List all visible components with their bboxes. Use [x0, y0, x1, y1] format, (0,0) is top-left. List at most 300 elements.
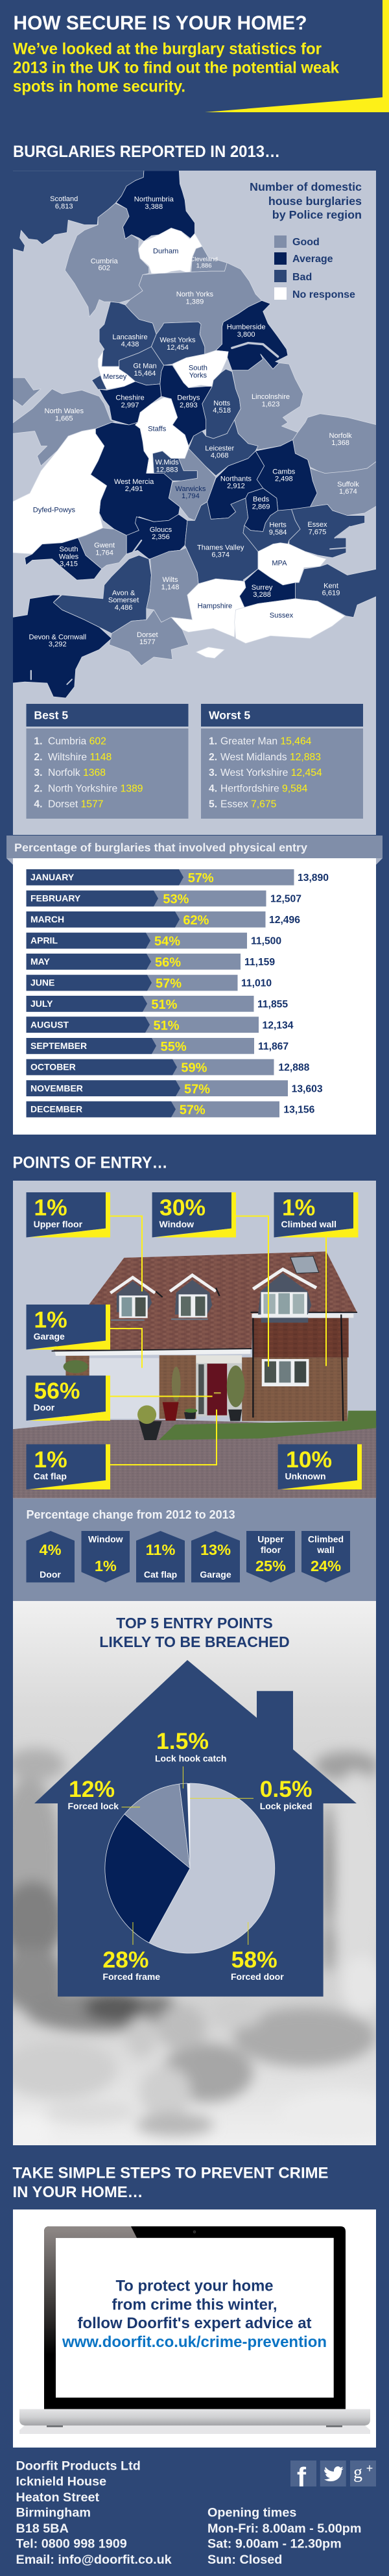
- panel: best 5: 2.: [34, 752, 42, 763]
- badge: window: [82, 1531, 130, 1582]
- badge: upper floor: [246, 1531, 295, 1582]
- callout: window: Window: [159, 1219, 194, 1229]
- map labels: 2,869: [252, 503, 270, 511]
- panel: worst 5: 5.: [209, 799, 217, 810]
- bar: January: [26, 869, 329, 885]
- pie label: lock hook catch: Lock hook catch: [155, 1753, 226, 1763]
- bar: July: JULY: [30, 998, 53, 1009]
- map labels: 1,764: [95, 549, 113, 557]
- badge: window: 1%: [95, 1558, 117, 1574]
- roof: [53, 1251, 357, 1351]
- map legend heading: [250, 180, 362, 221]
- map labels: Dorset: [137, 631, 158, 639]
- map labels: 7,675: [309, 528, 326, 536]
- callout: upper floor: 1%: [34, 1195, 67, 1221]
- bar: May: 56%: [155, 956, 181, 970]
- badge: cat flap: 11%: [146, 1541, 175, 1558]
- map legend heading: house burglaries: [268, 195, 362, 208]
- laptop screen text: www.doorfit.co.uk/crime-prevention: [62, 2333, 327, 2351]
- map labels: Devon & Cornwall: [29, 633, 86, 641]
- bar: November: NOVEMBER: [30, 1083, 83, 1093]
- callout: garage: [26, 1305, 142, 1368]
- region: Derbys: [160, 365, 212, 446]
- panel: worst 5: 4.: [209, 783, 217, 794]
- laptop screen text: follow Doorfit's expert advice at: [78, 2315, 312, 2332]
- callout: window: 30%: [159, 1195, 206, 1221]
- badge: door: [26, 1531, 75, 1582]
- region: Cheshire: [99, 381, 161, 425]
- dormer 1: [110, 1277, 163, 1321]
- region: Leicester: [189, 420, 258, 475]
- region: Isle of Wight: [196, 647, 224, 658]
- badge: climbed wall: 24%: [311, 1558, 341, 1574]
- bar: October: 59%: [181, 1061, 207, 1076]
- badge: garage: [191, 1531, 240, 1582]
- pie label: forced frame: [102, 1947, 160, 1982]
- map labels: W.Mids: [155, 459, 179, 466]
- map labels: 9,584: [269, 529, 287, 536]
- badge: garage: 13%: [200, 1541, 231, 1558]
- pie label: forced lock: 12%: [69, 1776, 115, 1802]
- region: Kent: [295, 564, 377, 618]
- region: Staffs: [136, 398, 189, 474]
- badge: climbed wall: [301, 1531, 350, 1582]
- bar: January: 13,890: [298, 873, 329, 884]
- panel: best 5: [26, 704, 188, 819]
- map legend heading: Number of domestic: [250, 180, 362, 193]
- map labels: 6,813: [55, 203, 73, 211]
- region: Durham: [139, 228, 202, 274]
- map labels: Notts: [213, 400, 231, 407]
- map labels: 12,883: [156, 466, 178, 474]
- map labels: West Yorks: [159, 337, 196, 344]
- bar: June: [26, 975, 272, 991]
- pie label: forced door: [231, 1947, 284, 1982]
- callout: climbed wall: 1%: [282, 1195, 315, 1221]
- panel: best 5: Best 5: [34, 709, 68, 722]
- region: Herts: [243, 509, 300, 551]
- callout: cat flap: Cat flap: [34, 1471, 67, 1481]
- region: South Wales: [25, 538, 102, 580]
- bar: May: 11,159: [244, 957, 275, 968]
- map labels: Humberside: [227, 324, 266, 331]
- bar: May: [26, 954, 275, 970]
- icon: google plus: [350, 2461, 376, 2486]
- map labels: 6,619: [322, 590, 340, 597]
- laptop screen text: [62, 2277, 327, 2351]
- region: Humberside: [216, 300, 288, 370]
- region: Scotland: [12, 171, 144, 252]
- footer address: B18 5BA: [16, 2522, 69, 2536]
- map labels: 3,415: [60, 560, 78, 568]
- banner: percentage of burglaries: [6, 836, 383, 865]
- laptop screen text: from crime this winter,: [112, 2296, 277, 2313]
- estuaries: [31, 343, 350, 684]
- footer opening times: Opening times: [207, 2506, 296, 2520]
- bar: July: 51%: [151, 998, 178, 1012]
- map labels: North Wales: [44, 407, 84, 415]
- map labels: Gt Man: [133, 362, 157, 370]
- bar: August: 51%: [153, 1018, 180, 1033]
- heading: burglaries reported: BURGLARIES REPORTED IN 2013…: [13, 143, 280, 161]
- bar: June: JUNE: [30, 978, 54, 988]
- bar: November: 57%: [184, 1082, 210, 1096]
- map labels: Herts: [269, 522, 287, 529]
- panel: best 5: 3.: [34, 767, 42, 778]
- map labels: 1,665: [55, 415, 73, 422]
- map labels: Leicester: [205, 444, 234, 452]
- map labels: 2,498: [275, 475, 293, 483]
- region: Dyfed-Powys: [12, 429, 107, 554]
- region: Northumbria: [116, 171, 194, 241]
- pie label: forced lock: [67, 1776, 119, 1811]
- bar: October: 12,888: [278, 1063, 310, 1074]
- panel: worst 5: Hertfordshire: [220, 783, 282, 794]
- icon: google plus: g: [353, 2462, 362, 2483]
- panel: worst 5: Essex: [220, 799, 251, 810]
- region: Northants: [207, 451, 265, 519]
- map labels: Surrey: [252, 584, 273, 592]
- bar chart: months: [26, 869, 329, 1118]
- region: Dorset: [109, 610, 191, 666]
- map labels: Warwicks: [175, 485, 206, 493]
- footer address: Heaton Street: [16, 2490, 100, 2505]
- map labels: West Mercia: [114, 478, 154, 486]
- map of police regions: [12, 171, 377, 698]
- panel: best 5: 4.: [34, 799, 42, 810]
- panel: best 5: 1.: [34, 736, 42, 747]
- map labels: Beds: [253, 496, 270, 503]
- bar: July: 11,855: [257, 999, 288, 1010]
- map labels: 4,438: [121, 341, 139, 348]
- panel: physical entry chart background: [13, 858, 376, 1135]
- badge: climbed wall: Climbed: [308, 1534, 344, 1545]
- region: Suffolk: [310, 461, 377, 516]
- badge: door: Door: [40, 1569, 61, 1580]
- bar: March: MARCH: [30, 914, 64, 924]
- map labels: Durham: [153, 248, 178, 256]
- map labels: Somerset: [108, 597, 139, 605]
- map labels: Dyfed-Powys: [33, 507, 76, 514]
- map labels: 15,464: [134, 370, 156, 378]
- map labels: 4,068: [211, 452, 229, 460]
- map labels: MPA: [272, 560, 287, 568]
- pie label: forced frame: Forced frame: [102, 1971, 160, 1982]
- map labels: 3,292: [49, 641, 67, 649]
- map labels: Cambs: [272, 468, 296, 475]
- region: West Midlands: [152, 451, 197, 481]
- intro text: 2013 in the UK to find out the potential weak: [13, 58, 339, 77]
- pie leader lines: [122, 1766, 253, 1945]
- region: Gwent: [78, 528, 126, 569]
- callout: cat flap: 1%: [34, 1447, 67, 1473]
- bar: March: 62%: [183, 913, 209, 928]
- slice: forced lock 12%: [124, 1784, 190, 1868]
- callout: window: [152, 1192, 268, 1367]
- footer address: Birmingham: [16, 2506, 91, 2520]
- region: Avon and Somerset: [53, 555, 151, 633]
- map labels: 12,454: [167, 344, 189, 352]
- panel: worst 5: West Yorkshire: [220, 767, 291, 778]
- map labels: 2,912: [227, 483, 245, 490]
- callout: climbed wall: [274, 1192, 358, 1366]
- region: Thames Valley: [185, 498, 258, 584]
- map labels: 3,800: [237, 331, 255, 339]
- map labels: 1,623: [262, 400, 279, 408]
- bar: February: [26, 891, 301, 907]
- pie label: forced door: 58%: [231, 1947, 277, 1973]
- map labels: Cumbria: [91, 258, 118, 265]
- map labels: 1,886: [196, 262, 212, 269]
- panel: worst 5: 12,454: [291, 767, 322, 778]
- panel: best 5: 1368: [83, 767, 106, 778]
- garage door: [89, 1358, 159, 1419]
- panel: worst 5: Greater Man: [220, 736, 280, 747]
- bar: January: JANUARY: [30, 872, 75, 882]
- bar: April: 11,500: [251, 936, 281, 947]
- map labels: Lincolnshire: [252, 393, 290, 401]
- bar: December: [26, 1101, 315, 1118]
- pie label: forced door: Forced door: [231, 1971, 284, 1982]
- map labels: 1,389: [186, 298, 204, 306]
- icon: twitter: [320, 2461, 346, 2486]
- downpipes: [253, 1314, 343, 1421]
- map labels: Wilts: [163, 576, 178, 584]
- map labels: 2,997: [121, 402, 139, 409]
- map labels: 3,288: [253, 591, 271, 599]
- map labels: Mersey: [103, 373, 127, 381]
- bar: February: 53%: [163, 893, 189, 907]
- dormer 3: [253, 1270, 316, 1316]
- bar: May: MAY: [30, 956, 50, 967]
- badge: window: Window: [88, 1534, 123, 1545]
- bar: February: 12,507: [270, 894, 301, 905]
- bar: December: 57%: [180, 1103, 206, 1118]
- skylight: [290, 1256, 319, 1273]
- panel: worst 5: 3.: [209, 767, 217, 778]
- bar: April: 54%: [154, 935, 180, 949]
- heading: take simple steps: IN YOUR HOME…: [13, 2184, 143, 2201]
- map labels: Kent: [324, 582, 338, 590]
- panel: best 5: 2.: [34, 783, 42, 794]
- slice: lock hook catch 1.5%: [180, 1783, 190, 1868]
- panel: percentage change: [13, 1499, 376, 1601]
- icon: laptop: [19, 2226, 370, 2434]
- map labels: Northumbria: [134, 196, 174, 204]
- bar: December: 13,156: [283, 1105, 315, 1116]
- icon: facebook: [290, 2461, 316, 2492]
- map labels: Suffolk: [337, 481, 359, 488]
- panel: best 5: 602: [89, 736, 106, 747]
- bar: September: 55%: [161, 1040, 187, 1054]
- callout: door: 56%: [34, 1378, 80, 1404]
- heading: top 5 entry points: TOP 5 ENTRY POINTS: [116, 1615, 273, 1631]
- badge: upper floor: 25%: [255, 1558, 286, 1574]
- map labels: [29, 195, 359, 649]
- slice: lock picked 0.5%: [187, 1783, 190, 1868]
- bar: August: [26, 1017, 294, 1033]
- map labels: 6,374: [211, 551, 230, 559]
- map labels: 2,893: [180, 402, 198, 409]
- panel: best 5: Wiltshire: [48, 752, 89, 763]
- region: Surrey: [239, 569, 295, 607]
- heading: top 5 entry points: [99, 1615, 290, 1650]
- bar: April: [26, 933, 281, 949]
- pie chart: entry points: [105, 1783, 275, 1953]
- bar: April: APRIL: [30, 935, 58, 946]
- planters and plants: [64, 1360, 244, 1440]
- panel: best 5: 1148: [89, 752, 112, 763]
- map labels: Sussex: [270, 612, 294, 620]
- photo: hands background: [0, 1601, 389, 2154]
- panel: best 5: Cumbria: [48, 736, 89, 747]
- footer opening times: Mon-Fri: 8.00am - 5.00pm: [207, 2522, 361, 2536]
- heading: take simple steps: [13, 2164, 328, 2201]
- bar: August: AUGUST: [30, 1019, 69, 1029]
- footer opening times: Sat: 9.00am - 12.30pm: [207, 2537, 342, 2551]
- bar: September: 11,867: [258, 1041, 289, 1052]
- bar: February: FEBRUARY: [30, 893, 81, 904]
- map legend: No response: [292, 289, 355, 300]
- icon: google plus: +: [366, 2462, 373, 2475]
- region: Sussex: [235, 599, 345, 644]
- region: Wilts: [147, 548, 198, 622]
- region: North Wales: [12, 389, 117, 466]
- region: Lincolnshire: [232, 354, 303, 450]
- porch: [196, 1355, 242, 1364]
- photo: house illustration: [13, 1251, 376, 1499]
- map labels: 4,486: [115, 604, 132, 612]
- map labels: 1,368: [331, 439, 349, 447]
- map labels: Thames Valley: [197, 544, 244, 551]
- right upper wall: [253, 1318, 349, 1357]
- map legend: Good: [292, 237, 320, 248]
- region: West Mercia: [91, 422, 180, 535]
- region: MPA: [258, 543, 326, 585]
- map labels: 1,794: [182, 492, 200, 500]
- panel: worst 5: 1.: [209, 736, 217, 747]
- callout: upper floor: Upper floor: [34, 1219, 83, 1229]
- badge: cat flap: [136, 1531, 185, 1582]
- region: West Yorks: [151, 322, 205, 365]
- region: Greater Manchester: [119, 346, 164, 385]
- banner: percentage of burglaries: Percentage of burglaries that involved physical entry: [14, 841, 307, 854]
- bar: January: 57%: [188, 871, 214, 885]
- region: Anglesey: [12, 378, 41, 406]
- slice: forced door 58%: [149, 1783, 275, 1953]
- region: Gloucs: [126, 514, 187, 559]
- dormer 2: [170, 1275, 220, 1320]
- map labels: 2,356: [152, 533, 170, 541]
- panel: burglary map background: [13, 171, 376, 835]
- eaves: [54, 1349, 251, 1356]
- icon: facebook: f: [297, 2462, 307, 2492]
- region: Beds: [244, 488, 278, 532]
- right lower wall: [242, 1357, 348, 1421]
- map labels: 602: [98, 265, 110, 272]
- middle brick: [159, 1355, 196, 1419]
- header accent: yellow corner: [205, 0, 389, 112]
- map labels: Wales: [59, 553, 79, 561]
- badge: garage: Garage: [200, 1569, 231, 1580]
- region: Lancashire: [98, 302, 156, 367]
- percentage change heading: Percentage change from 2012 to 2013: [26, 1508, 235, 1521]
- pie label: lock hook catch: [155, 1728, 226, 1763]
- region: South Yorks: [172, 350, 228, 388]
- panel: points of entry background: [13, 1181, 376, 1499]
- map labels: North Yorks: [176, 291, 214, 298]
- bar: October: [26, 1059, 310, 1076]
- panel: best 5: Dorset: [48, 799, 81, 810]
- footer address: Email: info@doorfit.co.uk: [16, 2553, 172, 2567]
- map labels: 2,491: [125, 485, 143, 493]
- badge: upper floor: floor: [261, 1545, 281, 1555]
- map labels: Hampshire: [198, 602, 232, 610]
- map labels: Lancashire: [112, 333, 148, 341]
- map labels: South: [60, 546, 78, 553]
- map labels: Scotland: [50, 195, 78, 203]
- map labels: 3,388: [145, 203, 163, 211]
- panel: worst 5: [201, 704, 363, 819]
- bar: March: 12,496: [269, 915, 300, 926]
- slice: forced frame 28%: [105, 1814, 190, 1943]
- bar: October: OCTOBER: [30, 1062, 76, 1072]
- bar: December: DECEMBER: [30, 1104, 82, 1114]
- lawn: [159, 1411, 376, 1440]
- callout: garage: Garage: [34, 1331, 65, 1342]
- region: Essex: [289, 504, 365, 558]
- map labels: Cheshire: [115, 394, 145, 402]
- panel: laptop panel: [13, 2209, 376, 2448]
- bar: September: SEPTEMBER: [30, 1041, 87, 1051]
- map labels: Cleveland: [190, 256, 218, 263]
- region: Warwicks: [169, 448, 216, 520]
- map legend: Bad: [292, 272, 312, 283]
- footer address: Doorfit Products Ltd: [16, 2459, 141, 2473]
- bar: November: [26, 1080, 323, 1096]
- pie label: lock picked: 0.5%: [260, 1776, 312, 1802]
- map labels: Norfolk: [329, 432, 352, 440]
- footer opening times: Sun: Closed: [207, 2553, 282, 2567]
- region: Cumbria: [65, 203, 149, 317]
- region: North Yorks: [125, 263, 262, 354]
- callout: door: [26, 1375, 213, 1421]
- panel: worst 5: 7,675: [251, 799, 277, 810]
- map labels: Avon &: [112, 590, 136, 597]
- badge: door: 4%: [40, 1541, 62, 1558]
- map labels: Essex: [307, 521, 327, 529]
- callout: climbed wall: Climbed wall: [281, 1219, 336, 1229]
- callout: garage: 1%: [34, 1307, 67, 1333]
- front door: [207, 1364, 227, 1415]
- callout: unknown: Unknown: [285, 1471, 325, 1481]
- footer address: Icknield House: [16, 2475, 106, 2489]
- bar: June: 57%: [156, 977, 182, 991]
- map labels: 1577: [139, 638, 156, 646]
- map labels: 4,518: [213, 407, 231, 415]
- bar: March: [26, 911, 300, 928]
- region: Notts: [202, 369, 241, 439]
- bar: November: 13,603: [292, 1083, 323, 1094]
- pie label: lock picked: Lock picked: [260, 1801, 312, 1811]
- map labels: Northants: [220, 475, 252, 483]
- badge: upper floor: Upper: [257, 1534, 284, 1545]
- callout: unknown: [278, 1444, 362, 1489]
- pie label: forced frame: 28%: [102, 1947, 148, 1973]
- panel: worst 5: 9,584: [282, 783, 308, 794]
- region: Cleveland: [191, 247, 227, 272]
- bar: July: [26, 996, 288, 1012]
